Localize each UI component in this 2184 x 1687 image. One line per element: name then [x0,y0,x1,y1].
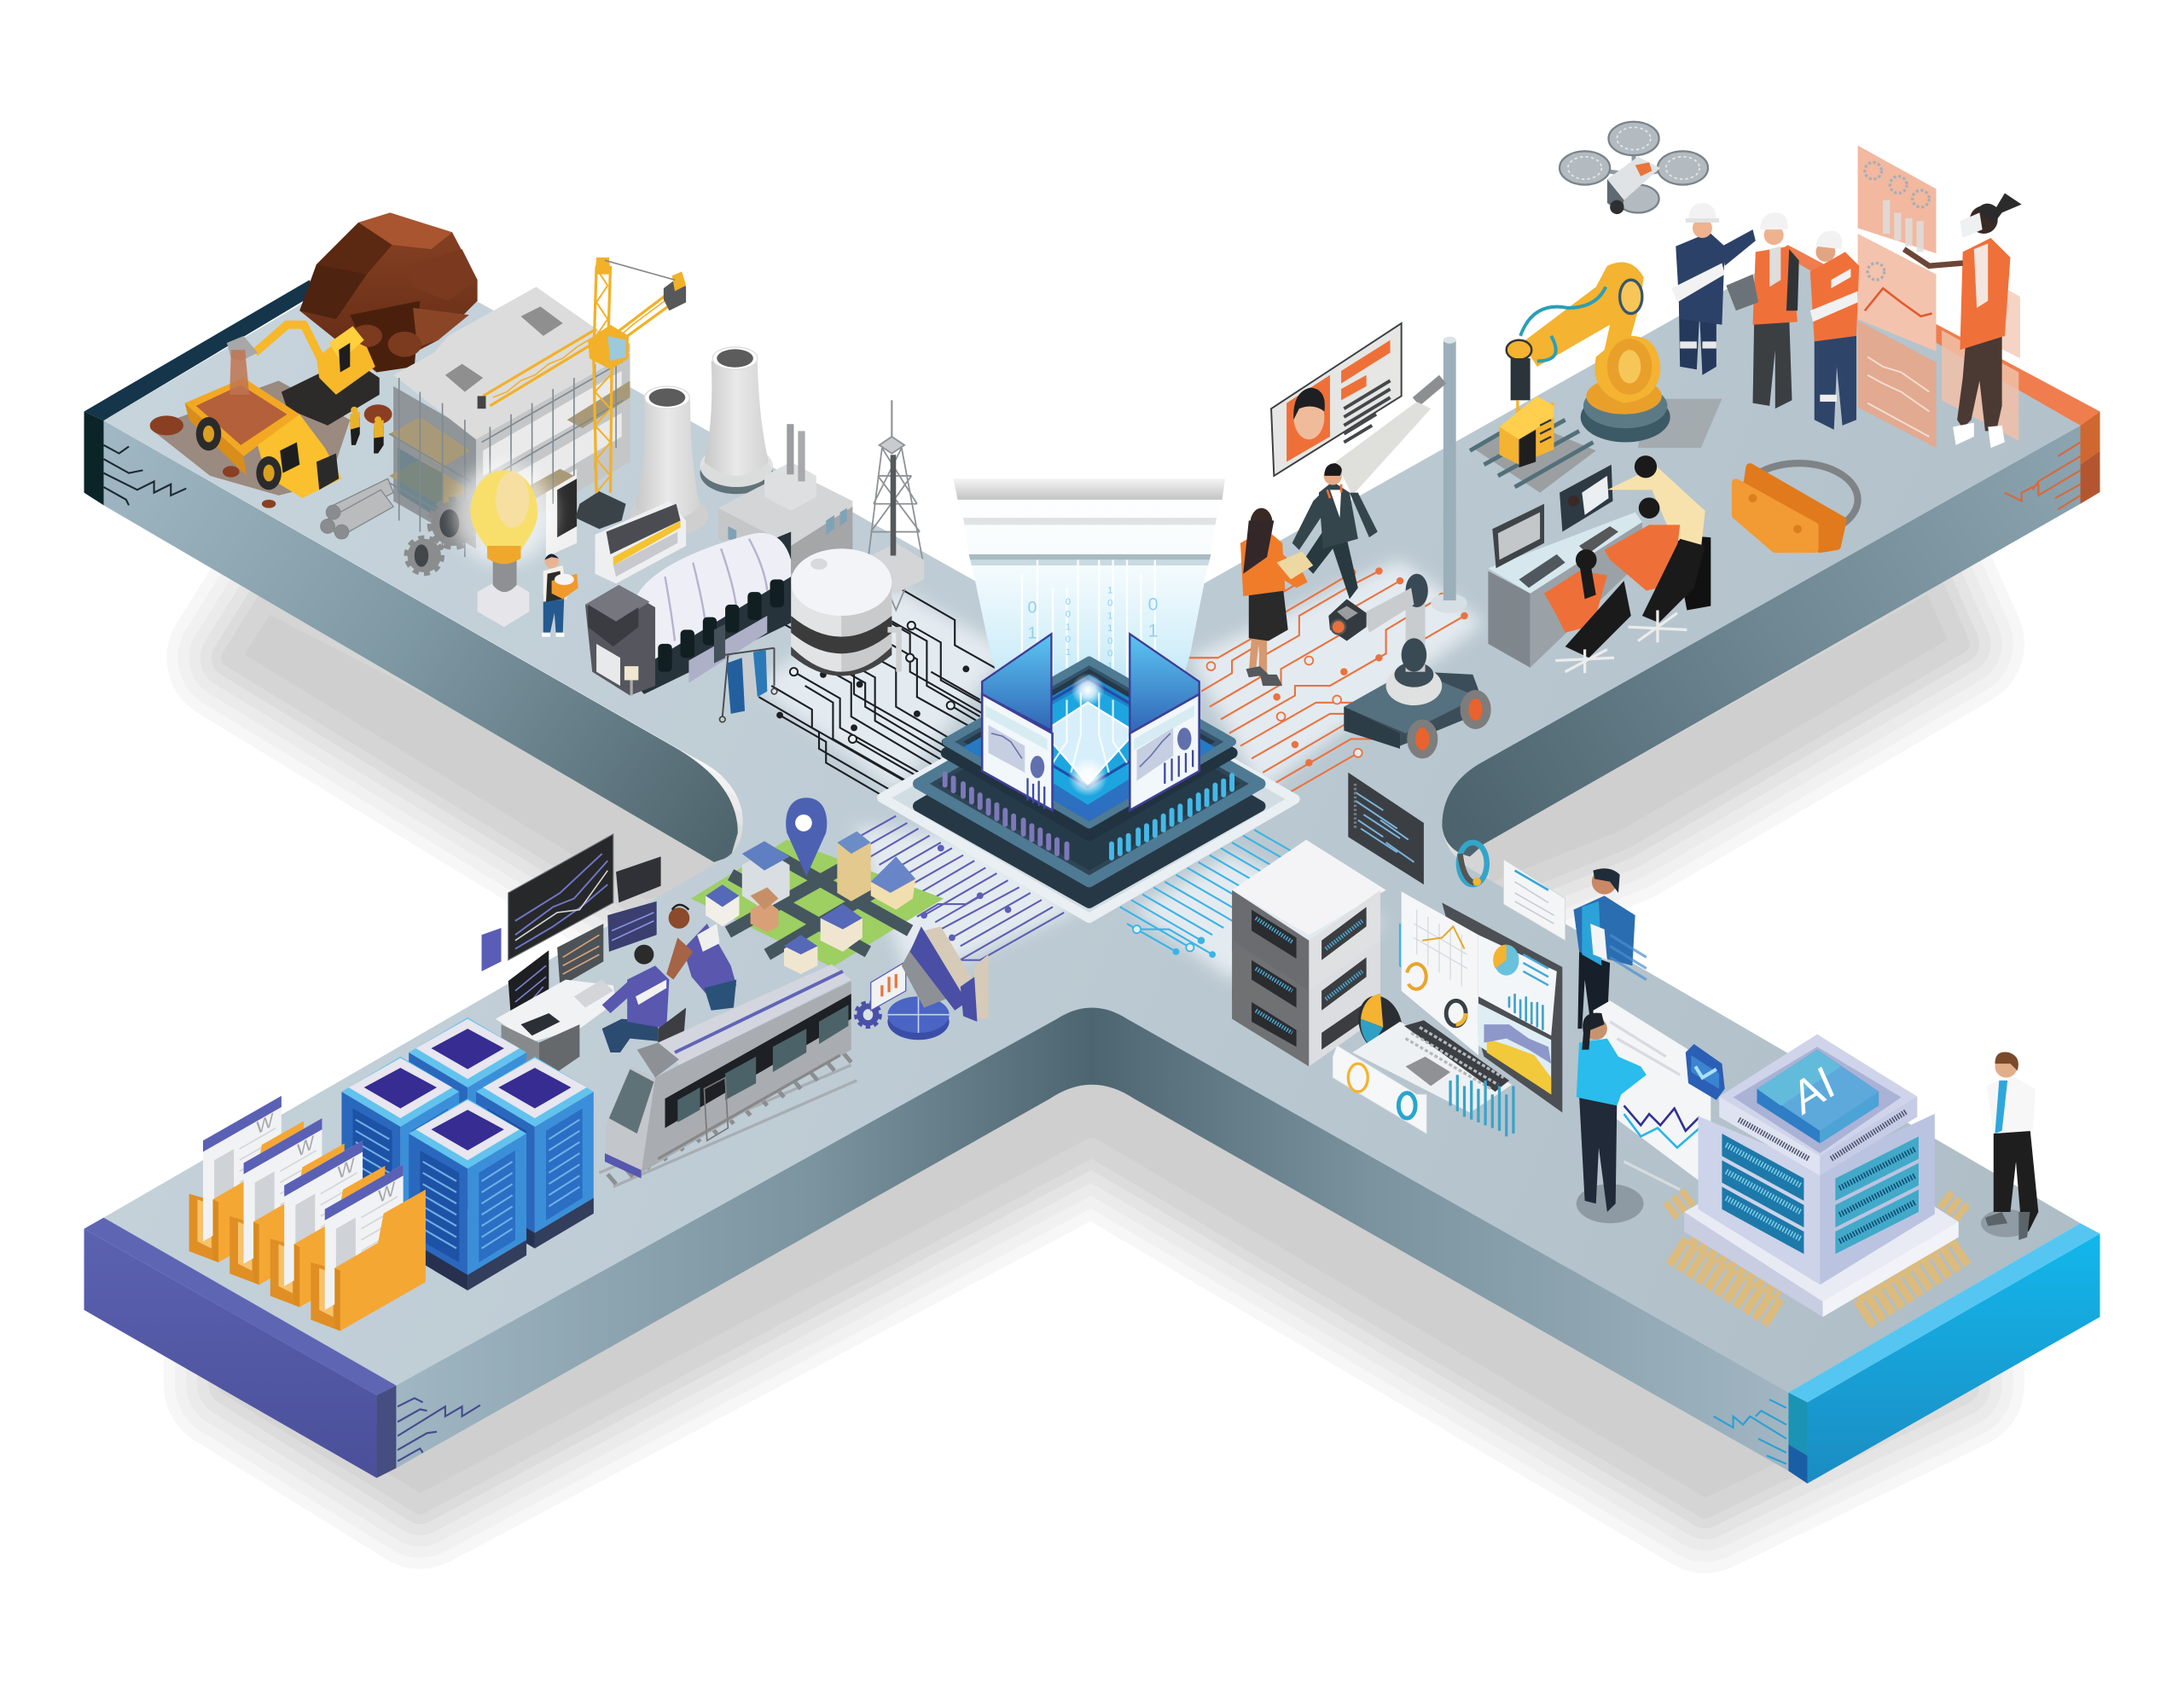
binary digits: 0 [1107,636,1112,646]
glass panel: back right [1130,634,1199,733]
control console with operators [1488,455,1711,673]
white chart board [1593,1000,1711,1190]
analytics dashboard monitor [1402,891,1562,1113]
tower crane [478,258,686,529]
thinking man [1981,1052,2038,1240]
cooling tower: rear [700,347,773,494]
binary digits: 0 [1028,599,1037,617]
binary digits: 1 [1066,647,1071,658]
gear icon [857,1004,880,1026]
circuit traces: blue [1120,830,1425,983]
AI server building [1669,1035,1966,1317]
excavator [227,325,380,426]
boulders [150,404,392,508]
platform top surface [103,252,2081,1393]
woman with tablet [1240,508,1313,686]
binary digits: 1 [1148,621,1159,641]
binary digits: 0 [1148,674,1159,694]
rack slots right [1835,1136,1919,1254]
edge cap: bottom-left purple [84,1218,396,1478]
rack slots left [1722,1133,1804,1254]
site workers [350,407,384,454]
info cards [1333,1046,1426,1133]
pipes [321,478,393,539]
yellow robot arm [1507,262,1722,448]
beam bands [954,478,1225,565]
worker with basket [542,554,578,637]
dashboard screen right [1130,694,1199,810]
commuter train [599,965,857,1187]
check badge [1686,1044,1725,1100]
man walking in suit [1292,463,1378,599]
pink holographic panels [1858,146,2020,448]
machine on rails [1470,396,1596,493]
scan beam [1336,402,1431,496]
server towers [341,1017,594,1290]
binary digits [1028,586,1159,694]
binary digits: 0 [1066,635,1071,645]
blue pins [1112,775,1232,858]
rock mound [299,212,478,372]
platform slab [84,245,2100,1483]
dirt patch [150,380,350,496]
binary digits: 0 [1107,599,1112,609]
location pin [786,797,827,876]
circuit traces: purple [861,816,1064,977]
panel: smart city and rail arm [189,797,989,1331]
drone [1560,122,1708,214]
standing operator [666,905,736,1011]
panel: mining and construction arm [150,212,924,722]
mini bar card [871,961,906,1011]
trace glows [756,559,1484,980]
binary digits: 1 [1066,622,1071,632]
AI chip block [1757,1050,1879,1144]
panel: analytics and AI arm [1232,773,2038,1317]
purple pins [945,774,1066,858]
dump truck [185,350,341,498]
woman in blue [1577,1013,1647,1223]
side face: top-left arm [103,420,738,862]
seated operator [602,945,686,1057]
glass panel: back left [982,634,1051,731]
binary digits: 1 [1107,611,1112,621]
keyboard [1352,1020,1512,1113]
camera pole [1413,337,1467,613]
clothes rack [720,648,777,722]
code panel [1348,773,1424,884]
worker in navy coverall [1671,203,1756,375]
report sheet [1503,860,1565,941]
panel: industrial operations arm [1240,122,2022,758]
dashboard screen left [982,694,1053,810]
circuit marks on slab ends [103,443,2081,1464]
mobile robot [1328,574,1491,758]
side face: lower arms [396,1000,1788,1471]
operator desk [496,980,616,1081]
man with tablet [1573,868,1647,1029]
gauge ring [1459,843,1487,886]
document folders [189,1096,426,1331]
binary digits: 1 [1107,623,1112,634]
circuit traces: black [758,580,1000,812]
chip core [963,675,1215,821]
VR woman [1904,193,2022,448]
stepped bar graphic [902,926,989,1022]
smart city map [691,797,944,974]
binary digits: 0 [1066,610,1071,620]
circuit traces: orange [1188,567,1468,795]
binary digits: 0 [1148,594,1159,614]
gold pins [1669,1195,1966,1315]
light bulb [454,463,555,627]
worker in orange vest from behind [1810,231,1859,430]
ground shadow [229,581,1960,1509]
building cluster [706,832,915,974]
binary digits: 1 [1107,586,1112,596]
power plant block [718,424,852,574]
3D pie chart [887,996,950,1040]
binary digits: 0 [1107,649,1112,659]
worker in orange vest with tablet [1726,212,1799,409]
oil derrick [868,400,924,610]
edge cap: bottom-right blue [1788,1223,2100,1483]
textile dryer machine [585,532,791,696]
gears [408,501,476,572]
side face: top-right arm [1442,426,2081,856]
AI label: AI [1786,1056,1842,1125]
edge cap: top-right orange [1778,245,2100,504]
building under construction [389,287,630,557]
chip base lower tier [919,661,1260,902]
binary digits: 0 [1148,647,1159,668]
bar cluster [1450,1075,1513,1136]
3D pie [1351,990,1409,1059]
central AI chip [882,634,1295,918]
binary digits: 0 [1066,597,1071,607]
monitoring screens [482,834,661,1019]
binary digits: 1 [1107,661,1112,671]
chip socket plate [882,681,1295,918]
light beam from central chip [954,478,1225,784]
storage tank [791,548,899,676]
edge cap: top-left navy [84,280,315,505]
binary digits: 1 [1028,623,1037,642]
ID card panel [1271,323,1402,476]
cooling tower: front [630,386,708,536]
VR headset [1736,463,1858,548]
stacked server units [1232,840,1386,1066]
laundry machine [595,501,686,583]
